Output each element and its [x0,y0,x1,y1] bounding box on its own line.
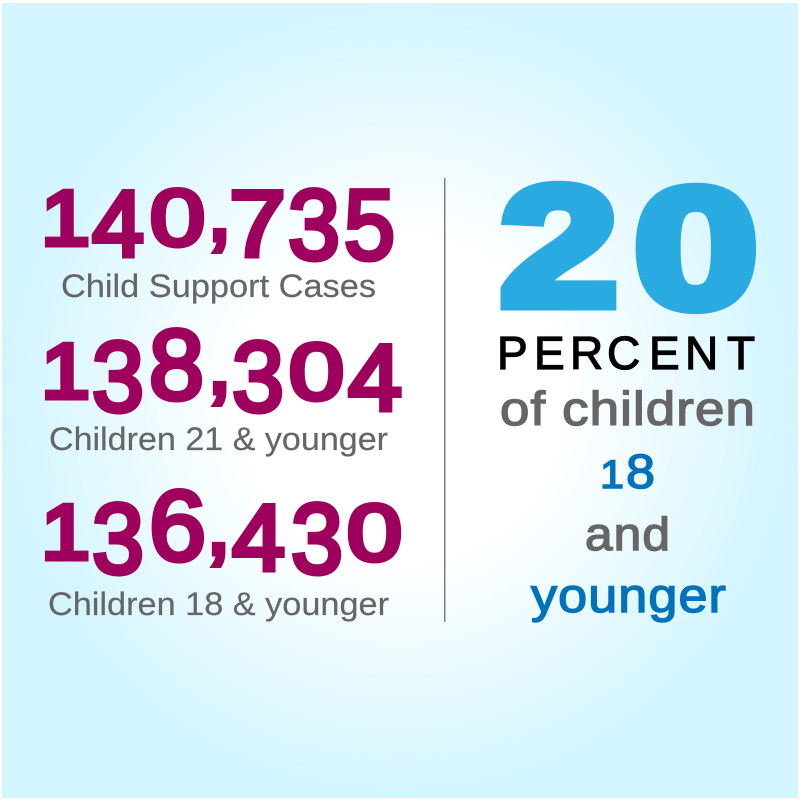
number: 136,430: 3 [92,483,144,594]
number: 18 [600,446,655,499]
number: 138,304 [41,309,402,432]
number: 138,304: 8 [149,309,204,420]
number: 138,304: 3 [232,321,284,432]
number: 138,304: 4 [348,325,402,430]
stat: 138,304 children 21 and younger [41,309,402,457]
label: Children 21 & younger: Children 21 & younger [49,421,388,457]
number: 140,735: 4 [92,171,144,276]
label: Child Support Cases: Child Support Cases [61,268,376,304]
text: and: and [585,508,671,560]
number: 136,430: 0 [347,488,402,577]
number: 140,735: 0 [150,173,205,262]
stat: 140,735 child support cases [41,160,395,304]
number: 140,735: 1 [41,174,90,262]
big number: 20: 2 [500,152,618,342]
stat: 136,430 children 18 and younger [41,470,402,622]
number: 140,735: 7 [229,171,286,276]
number: 18: 8 [626,446,655,499]
number: 136,430: 4 [232,485,285,590]
number: 140,735: 3 [288,169,340,280]
number: 138,304: , [207,313,232,413]
number: 138,304: 0 [289,327,344,416]
number: 18: 1 [600,453,624,497]
big number: 20: 0 [634,154,758,344]
number: 140,735: 5 [344,169,395,280]
big number: 20 [500,152,758,344]
number: 138,304: 1 [41,327,90,415]
number: 136,430 [41,470,402,594]
number: 136,430: , [206,474,231,574]
number: 140,735: , [207,160,232,260]
label: Children 18 & younger: Children 18 & younger [48,586,389,622]
number: 138,304: 3 [92,321,144,432]
callout: 20 percent of children 18 and younger [497,152,758,623]
number: 140,735 [41,160,395,280]
number: 136,430: 3 [291,483,343,594]
text: younger: younger [531,570,727,623]
number: 136,430: 6 [149,470,206,581]
text: of children: of children [500,382,756,435]
vertical divider [444,178,446,622]
number: 136,430: 1 [41,488,90,576]
word: PERCENT: PERCENT [497,327,755,379]
